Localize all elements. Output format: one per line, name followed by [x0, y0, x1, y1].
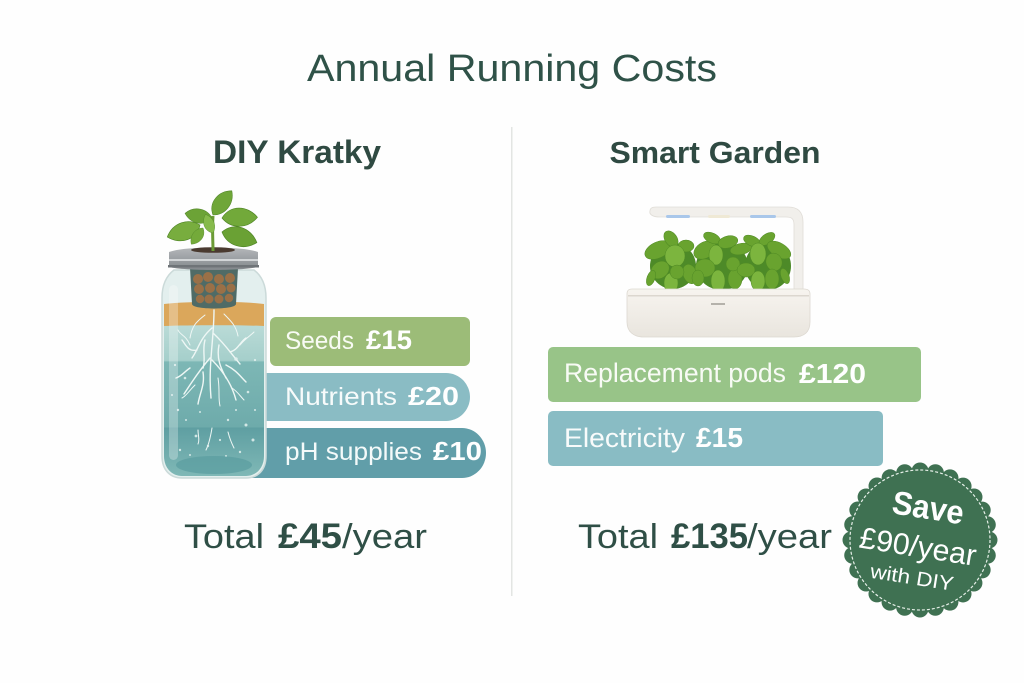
cost bar: Seeds: Seeds — [285, 327, 354, 355]
badge: savings — [849, 469, 991, 611]
total: Smart Garden: Total — [578, 518, 658, 556]
total: DIY: Total — [184, 518, 264, 556]
stem — [211, 216, 214, 251]
total: Smart Garden — [578, 517, 832, 556]
divider — [511, 127, 512, 596]
icon: smart garden device — [627, 207, 810, 337]
net pot — [190, 268, 238, 308]
badge: savings: with DIY — [868, 561, 955, 596]
total: DIY — [184, 517, 427, 556]
glass highlight — [169, 285, 178, 460]
badge: savings: Save — [890, 483, 967, 531]
lamp arm — [650, 207, 803, 290]
title: Annual Running Costs — [307, 48, 717, 90]
heading: DIY Kratky: DIY Kratky — [213, 134, 381, 170]
roots — [176, 310, 254, 450]
total: Smart Garden: £135 — [671, 517, 748, 556]
cost bar: Nutrients — [262, 373, 470, 421]
cost bar: Electricity — [548, 411, 883, 466]
jar bottom sediment — [176, 456, 252, 474]
cost bar: Electricity: Electricity — [564, 423, 686, 453]
cost bar: pH supplies — [235, 428, 486, 478]
LED lights — [666, 215, 690, 218]
orange air band — [164, 302, 264, 326]
icon: Kratky jar with basil plant — [162, 186, 266, 478]
cost bar: Seeds — [270, 317, 470, 366]
cost bar: Seeds: £15 — [366, 325, 412, 355]
jar body — [162, 270, 266, 478]
heading: Smart Garden: Smart Garden — [610, 135, 820, 170]
planter base — [627, 289, 810, 337]
total: Smart Garden: /year — [747, 518, 832, 556]
cost bar: Replacement pods: Replacement pods — [564, 358, 786, 388]
cost bar: Replacement pods — [548, 347, 921, 402]
total: DIY: £45 — [278, 517, 342, 556]
lid — [169, 248, 258, 270]
basil plants — [642, 228, 794, 293]
basil leaves — [165, 186, 260, 253]
cost bar: pH supplies: pH supplies — [285, 438, 422, 466]
water — [164, 322, 264, 476]
nutrient specks — [171, 357, 256, 457]
cost bar: pH supplies: £10 — [433, 436, 482, 466]
cost bar: Nutrients: £20 — [408, 381, 459, 411]
cost bar: Replacement pods: £120 — [799, 358, 866, 389]
total: DIY: /year — [342, 518, 427, 556]
cost bar: Nutrients: Nutrients — [285, 383, 397, 411]
cost bar: Electricity: £15 — [696, 422, 743, 453]
badge: savings: £90/year — [857, 522, 979, 573]
